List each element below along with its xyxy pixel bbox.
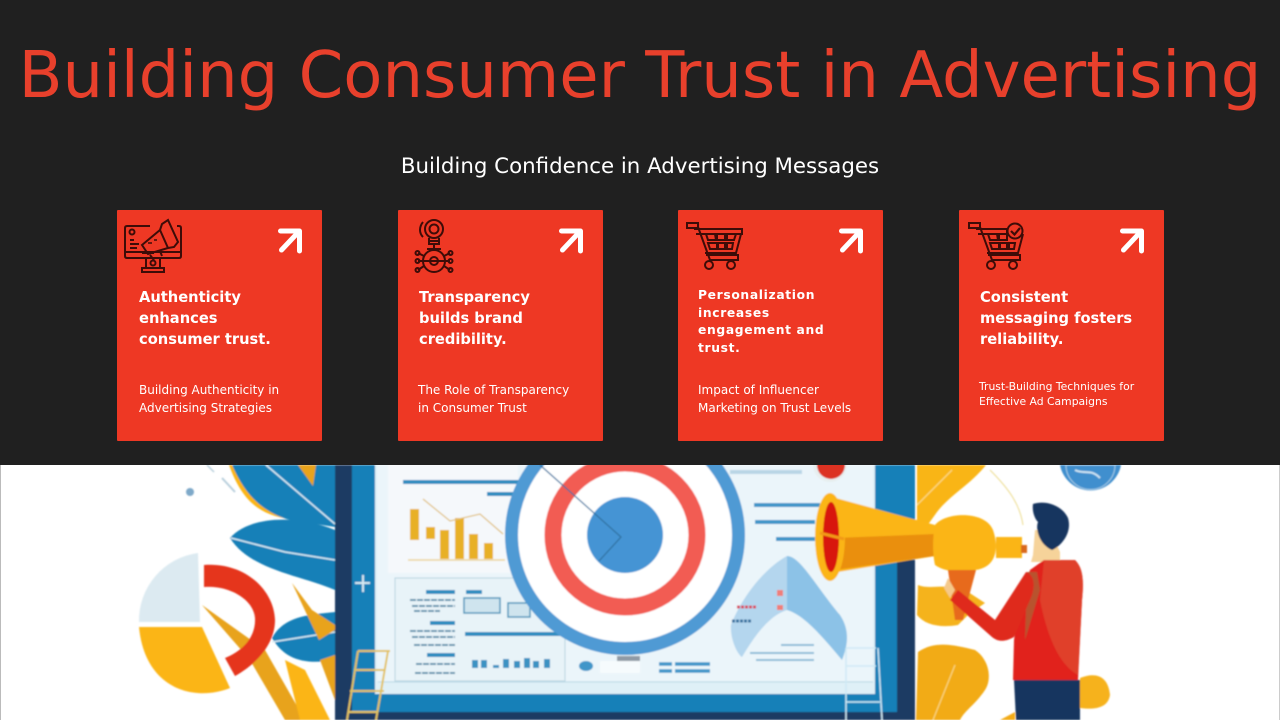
card heading: enhances (139, 310, 217, 327)
title: Building Consumer Trust in Advertising (19, 39, 1261, 113)
panel: consistency card (959, 210, 1164, 441)
globe coin (1060, 465, 1121, 490)
card heading: consumer trust. (139, 331, 271, 348)
card heading (698, 288, 824, 354)
panel: transparency card (398, 210, 603, 441)
card heading (419, 289, 530, 348)
ladders (347, 648, 882, 720)
card text: Advertising Strategies (139, 401, 272, 415)
card text: in Consumer Trust (418, 401, 527, 415)
card heading: credibility. (419, 331, 507, 348)
bar chart on screen (403, 482, 530, 560)
icon: shopping cart with check (968, 222, 1024, 270)
card heading: messaging fosters (980, 310, 1132, 327)
card text (978, 380, 1134, 408)
megaphone (815, 493, 1027, 620)
card heading: Authenticity (139, 289, 241, 306)
monitor frame (335, 465, 915, 720)
screen details right (378, 448, 873, 682)
card heading: Transparency (419, 289, 530, 306)
card heading (139, 289, 271, 348)
card text (418, 383, 569, 415)
icon: arrow (278, 228, 302, 254)
left foliage (186, 465, 335, 720)
card text: Impact of Influencer (698, 383, 819, 397)
house-shaped graph (731, 556, 847, 660)
man (944, 503, 1083, 720)
card heading: Personalization (698, 288, 815, 302)
card text: Building Authenticity in (139, 383, 279, 397)
icon: arrow (1120, 228, 1144, 254)
right foliage (916, 465, 1110, 720)
card heading: engagement and (698, 323, 824, 337)
panel: personalization card (678, 210, 883, 441)
panel: authenticity card (117, 210, 322, 441)
icon: arrow (839, 228, 863, 254)
icon: arrow (559, 228, 583, 254)
card heading (980, 289, 1132, 348)
card text: Trust-Building Techniques for (979, 380, 1134, 393)
card heading: builds brand (419, 310, 523, 327)
card heading: trust. (698, 340, 740, 354)
icon: shopping cart (686, 222, 743, 270)
pie chart pieces (139, 553, 275, 693)
card text: The Role of Transparency (418, 383, 569, 397)
card text (698, 383, 851, 415)
target (505, 415, 745, 673)
card heading: increases (698, 306, 770, 320)
illustration: marketer with megaphone and dashboard (0, 465, 1280, 720)
report panel on screen (395, 578, 590, 681)
icon: light bulb with gears (414, 219, 454, 273)
card heading: reliability. (980, 331, 1063, 348)
icon: monitor with megaphone (124, 218, 182, 273)
card text: Marketing on Trust Levels (698, 401, 851, 415)
card heading: Consistent (980, 289, 1068, 306)
card text (139, 383, 279, 415)
card text: Effective Ad Campaigns (979, 395, 1107, 408)
subtitle: Building Confidence in Advertising Messages (401, 154, 879, 179)
